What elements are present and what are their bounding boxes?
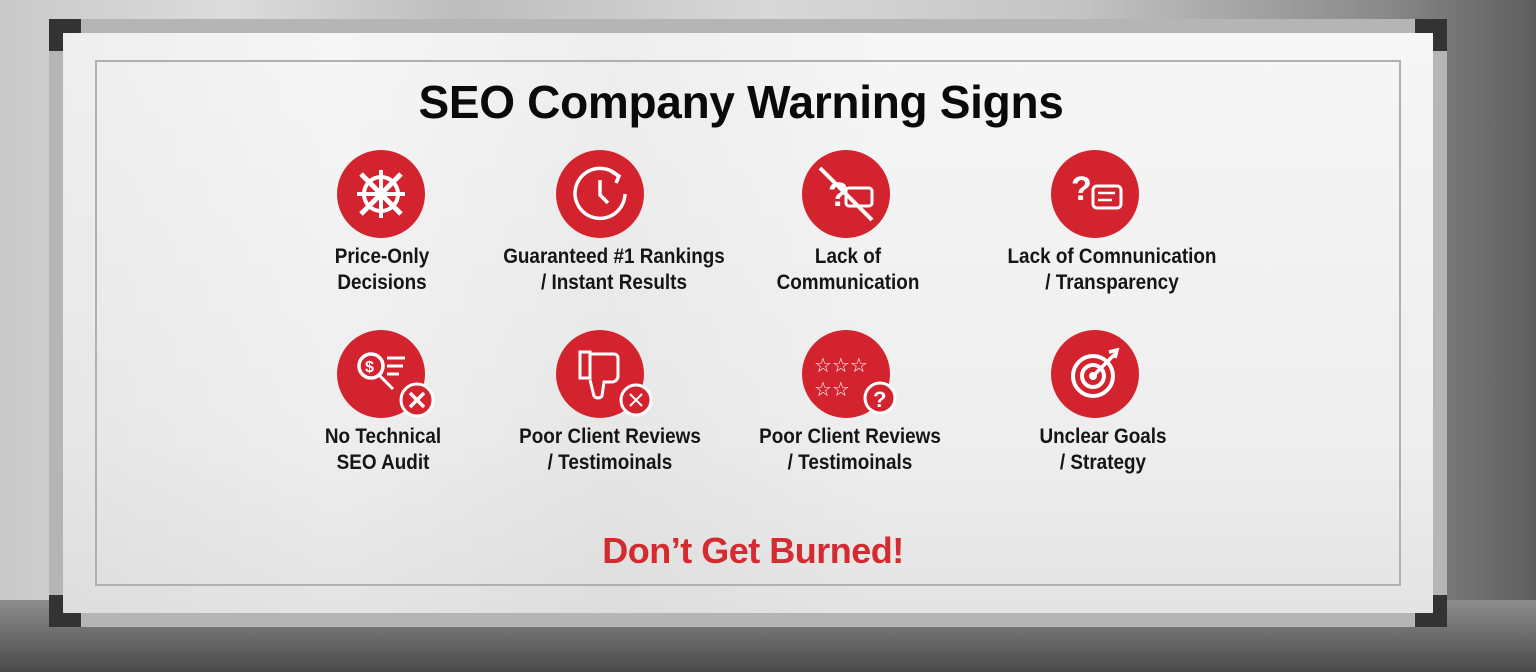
label: transparency: / Transparency [1045,271,1179,294]
label: guaranteed: Guaranteed #1 Rankings [503,245,725,268]
icon: price-only (crossed wheel) [337,150,425,238]
label: lack of communication [777,245,919,294]
label: unclear goals [1039,425,1167,474]
icon: clock [556,150,644,238]
label: lack of communication: Communication [777,271,919,294]
label: reviews 1: Poor Client Reviews [519,425,701,448]
label: unclear goals: / Strategy [1060,451,1146,474]
icon: audit [337,330,434,418]
label: reviews 1: / Testimoinals [548,451,672,474]
label: lack of communication: Lack of [815,245,881,268]
label: transparency: Lack of Comnunication [1008,245,1216,268]
icon: stars question: ☆☆☆ [814,353,868,377]
label: guaranteed [503,245,725,294]
label: transparency [1008,245,1216,294]
icon: stars question: ? [873,387,886,412]
icon: stars question: ☆☆ [814,377,850,401]
icon: stars question [802,330,896,418]
label: unclear goals: Unclear Goals [1039,425,1167,448]
label: guaranteed: / Instant Results [541,271,687,294]
label: audit [325,425,441,474]
icon: no communication [802,150,890,238]
label: price-only: Price-Only [335,245,429,268]
label: reviews 2: Poor Client Reviews [759,425,941,448]
icon: audit: $ [365,359,374,376]
icon: thumbs down [556,330,652,418]
label: audit: No Technical [325,425,441,448]
label: price-only: Decisions [337,271,427,294]
title: SEO Company Warning Signs [418,76,1064,128]
icon: target [1051,330,1139,418]
label: audit: SEO Audit [337,451,429,474]
label: reviews 1 [519,425,701,474]
icon: question chat: ? [1071,170,1092,208]
label: price-only [335,245,430,294]
icon: no communication: ? [828,176,849,214]
label: reviews 2: / Testimoinals [788,451,912,474]
icon: question chat [1051,150,1139,238]
tagline: Don’t Get Burned! [602,530,904,571]
label: reviews 2 [759,425,941,474]
